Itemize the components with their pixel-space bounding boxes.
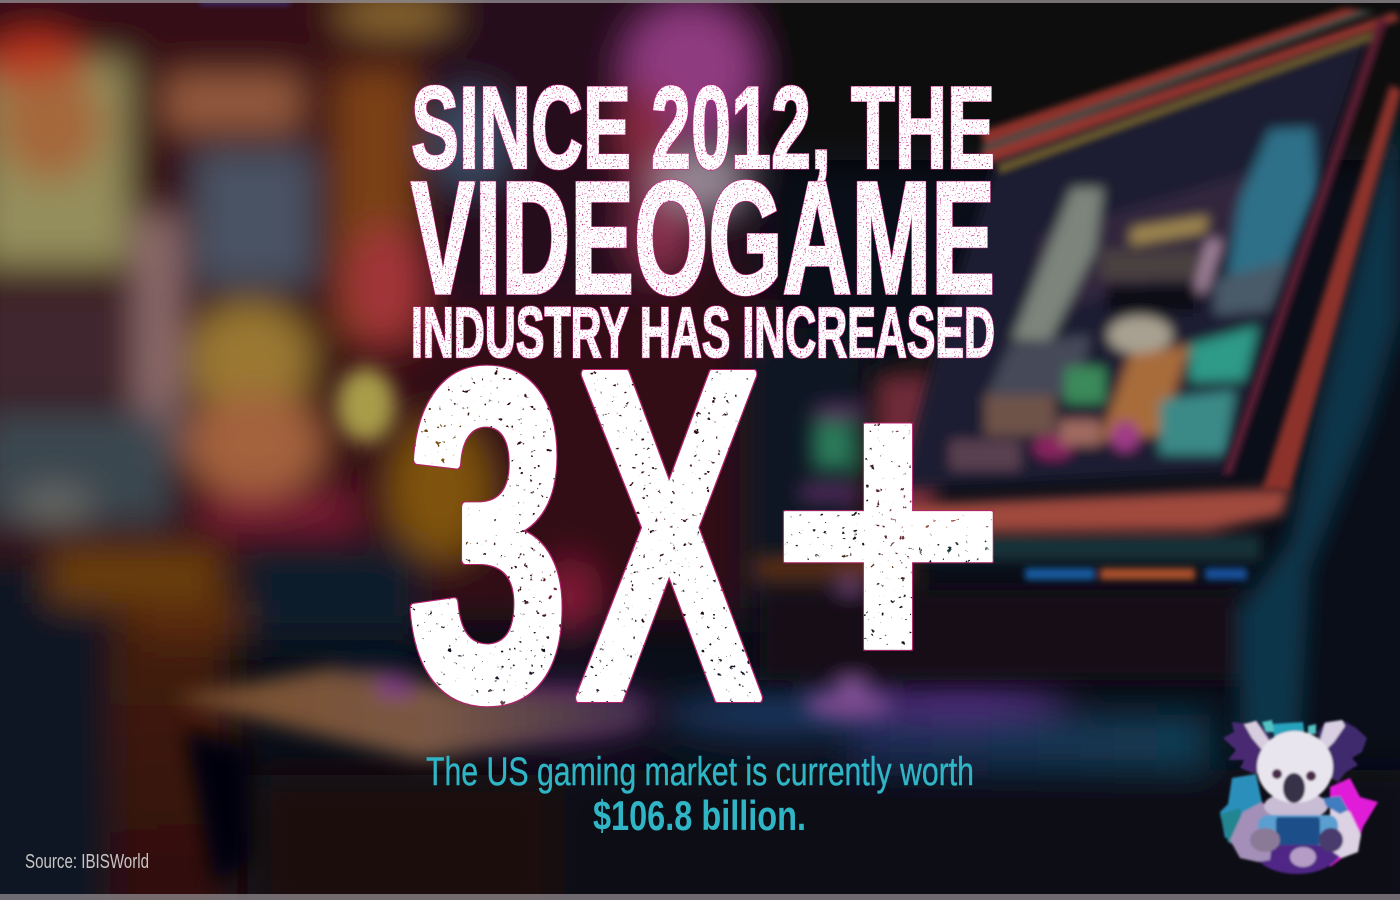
big stat: 3X+: X [576, 272, 763, 798]
market size statement: $106.8 billion. [593, 792, 806, 839]
big stat: 3X+: 3 [407, 274, 569, 795]
market size statement: The US gaming market is currently worth [426, 750, 974, 794]
big stat: 3X+ [407, 272, 1008, 798]
title [411, 62, 995, 373]
source note: Source: IBISWorld [25, 851, 149, 873]
market size statement [426, 750, 974, 839]
title line: industry has increased: INDUSTRY HAS INCREASED [411, 294, 995, 373]
big stat: 3X+: + [768, 286, 1008, 777]
title line: videogame: VIDEOGAME [411, 148, 995, 327]
icon: koala gamer logo [1220, 720, 1378, 874]
title line: since 2012, the: SINCE 2012, THE [411, 62, 995, 193]
